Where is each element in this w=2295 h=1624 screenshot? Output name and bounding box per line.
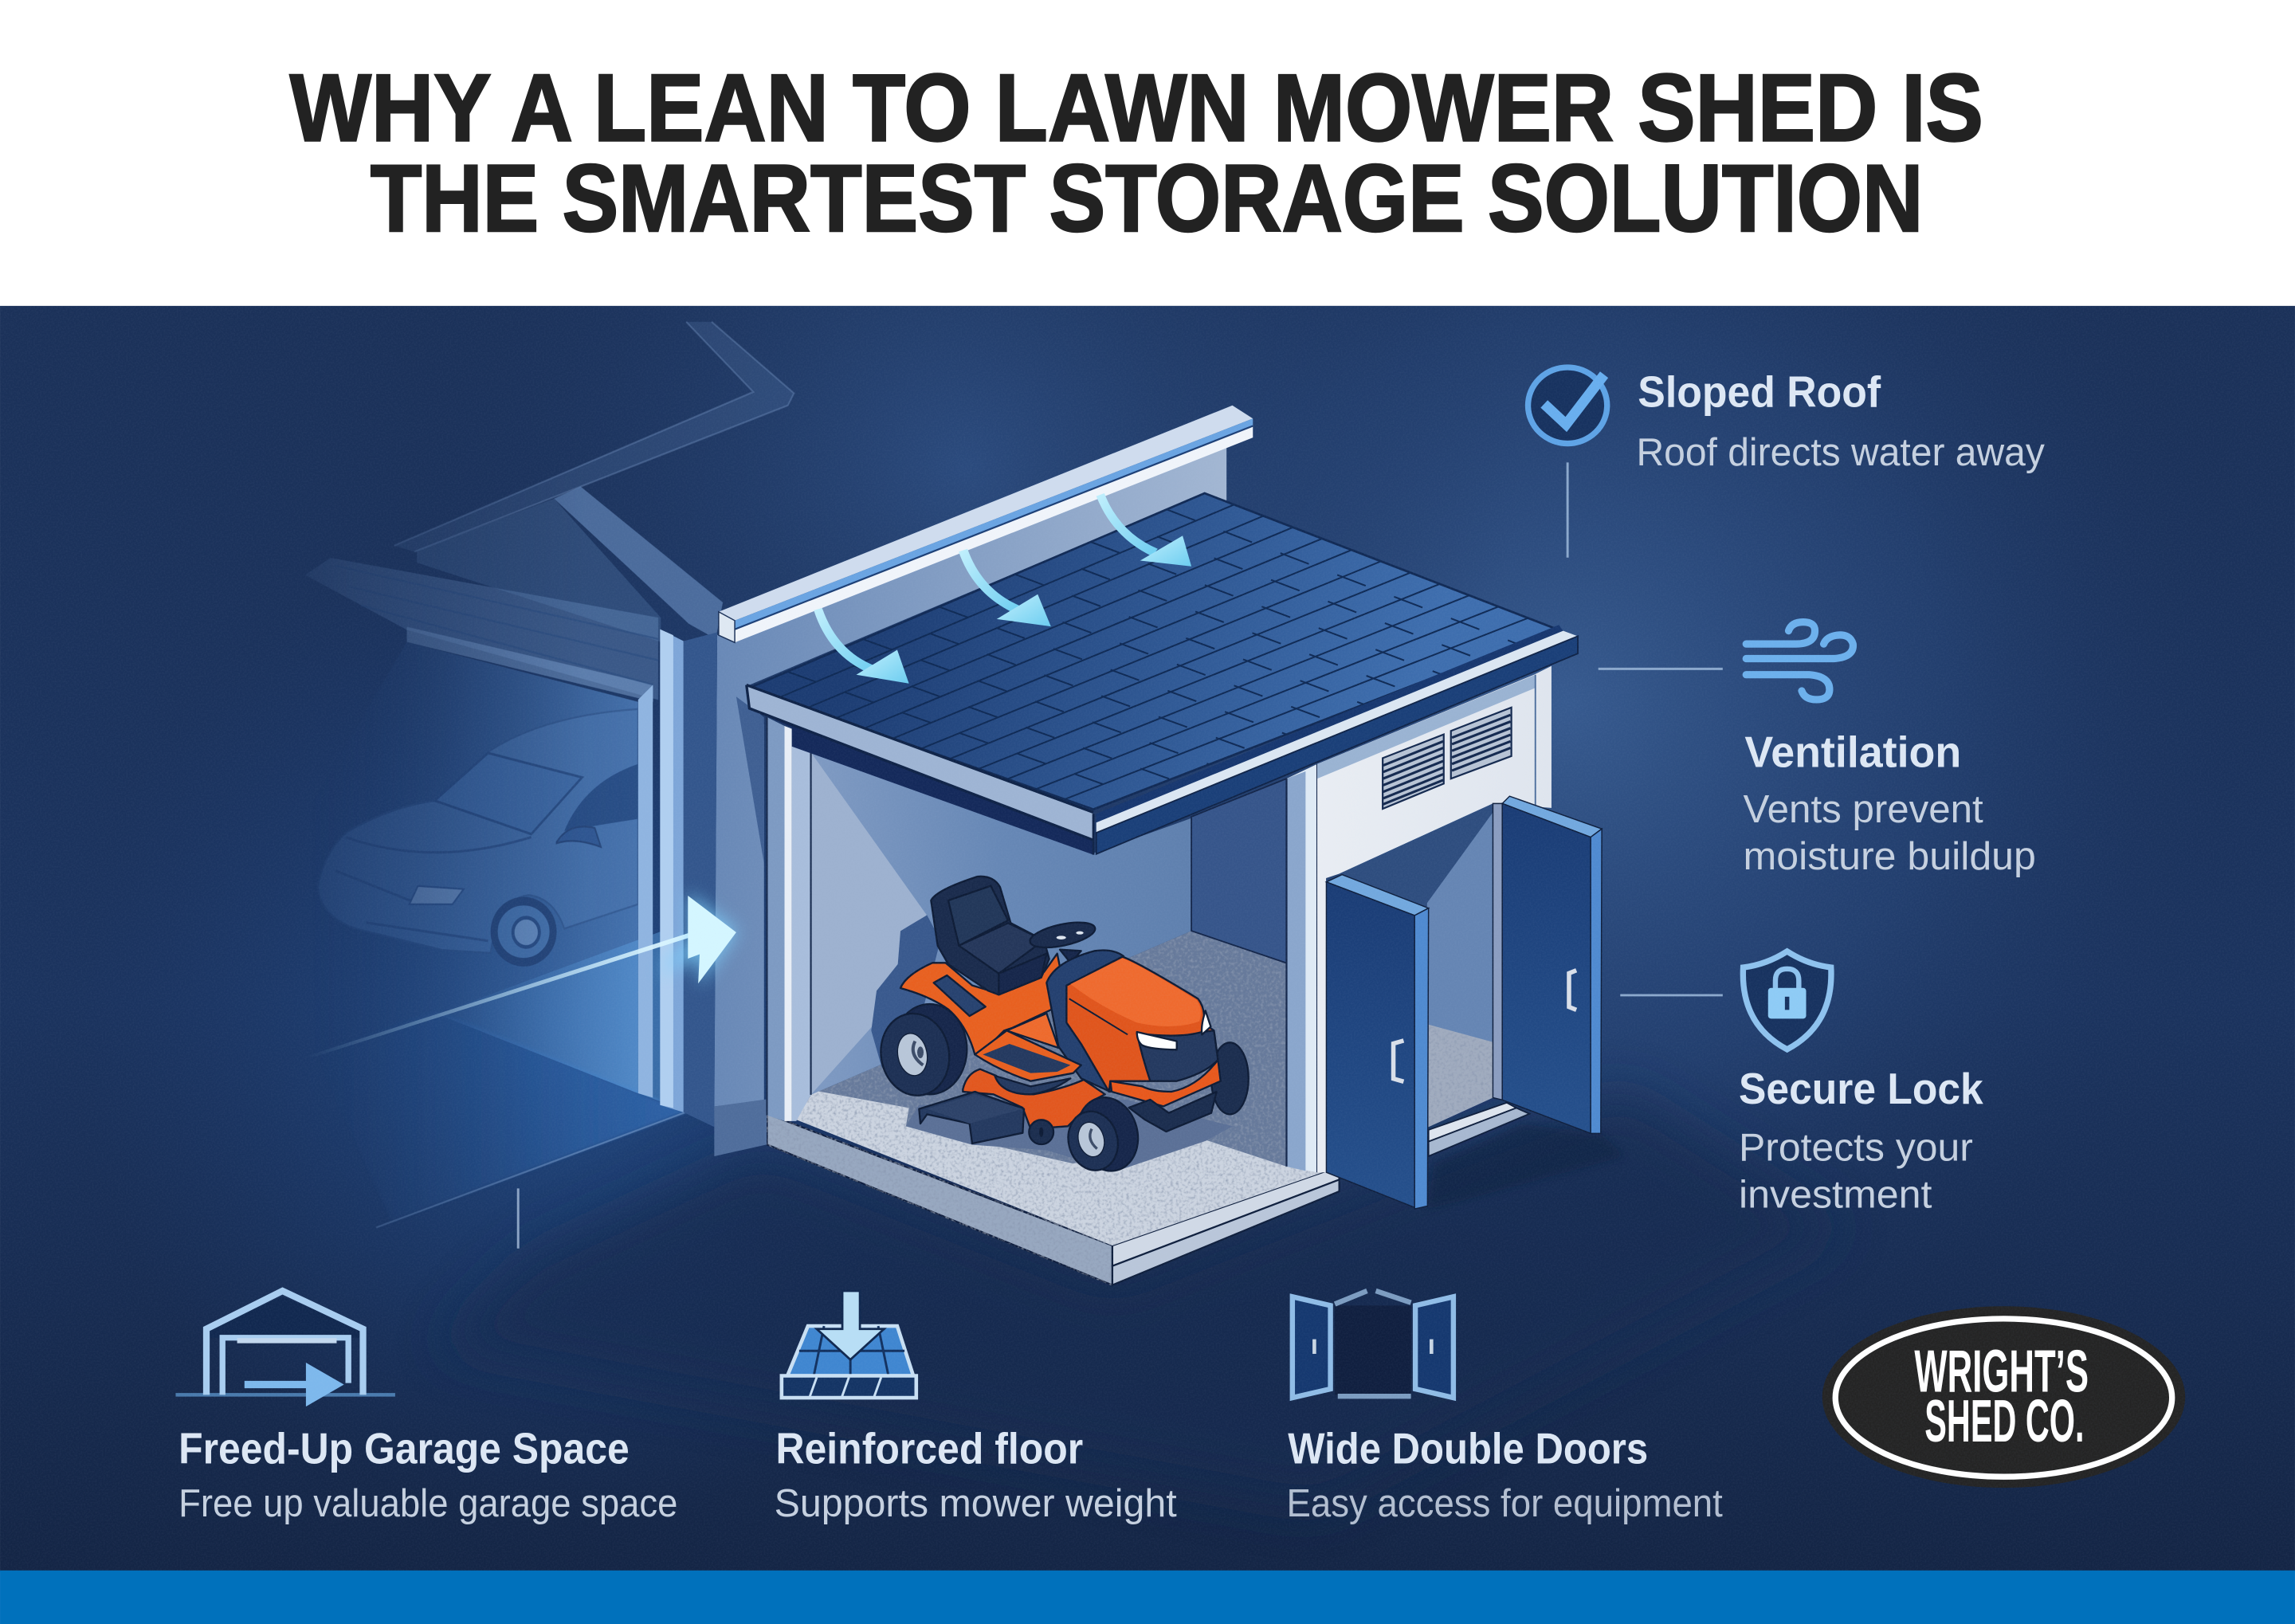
icon: floor with arrow: [782, 1291, 916, 1398]
left pillar: [767, 717, 811, 1121]
grille: [1137, 1030, 1218, 1081]
water flow arrows: [814, 493, 1191, 684]
upper garage roof line: [394, 322, 794, 551]
icon: shield lock: [1743, 951, 1831, 1049]
lower body: [963, 1069, 1105, 1129]
dark blue panel background: [0, 306, 2295, 1572]
slab left side: [767, 1114, 1112, 1285]
arrow 1: [814, 608, 909, 684]
callout: sloped roof: [1528, 367, 2045, 558]
arrow 3: [1096, 493, 1191, 567]
title: THE SMARTEST STORAGE SOLUTION: [371, 146, 1923, 252]
steering wheel: [1028, 918, 1097, 963]
feature: reinforced floor: [775, 1291, 1177, 1525]
car silhouette: [318, 709, 638, 962]
underside panel: [994, 1076, 1070, 1094]
front fascia: [1093, 625, 1578, 855]
shadow under fascia on panel: [1317, 675, 1536, 779]
mower deck: [919, 1092, 1024, 1143]
secure lock description: [1739, 1125, 1973, 1216]
connector line: [1567, 462, 1568, 558]
nose: [1110, 1060, 1221, 1106]
secure lock description: investment: [1739, 1171, 1932, 1216]
garage floor surface: [796, 931, 1340, 1245]
side light: [1202, 1010, 1210, 1034]
panel right stripe: [1535, 675, 1536, 808]
lawn mower: [871, 877, 1249, 1178]
connector line: [1620, 994, 1723, 996]
icon: open double doors: [1293, 1291, 1454, 1398]
description: Easy access for equipment: [1286, 1481, 1723, 1525]
sloped roof heading: Sloped Roof: [1638, 367, 1881, 417]
wall shadow strip: [684, 632, 717, 1127]
rafter: [554, 487, 723, 639]
transfer arrow: [304, 892, 738, 1057]
door jamb: [638, 630, 684, 1112]
rear wheel: [874, 1004, 967, 1101]
house base: [714, 1099, 767, 1156]
feature: wide double doors: [1286, 1291, 1723, 1525]
shed front panel: [1317, 666, 1552, 1172]
connector line: [1599, 668, 1723, 669]
heading: Wide Double Doors: [1288, 1424, 1648, 1473]
footrest: [975, 1030, 1081, 1081]
fender pad: [934, 975, 986, 1016]
icon: garage with arrow: [175, 1291, 395, 1406]
foot pad: [983, 1044, 1070, 1073]
header bands: [305, 558, 658, 702]
right door handle: [1569, 971, 1576, 1010]
description: Free up valuable garage space: [178, 1481, 677, 1525]
secure lock heading: Secure Lock: [1739, 1064, 1983, 1113]
seat: [931, 877, 1049, 994]
arrow 2: [959, 549, 1051, 626]
hood side line: [1069, 998, 1128, 1034]
lit part of wall: [811, 752, 927, 1095]
ventilation description: moisture buildup: [1744, 834, 2036, 878]
ventilation heading: Ventilation: [1744, 727, 1961, 776]
gable interior: [417, 499, 661, 642]
panel grain texture: [0, 306, 2295, 1571]
logo: [1822, 1306, 2185, 1488]
mower shadow on wall: [871, 915, 940, 1068]
heading: Freed-Up Garage Space: [178, 1424, 630, 1473]
secure lock description: Protects your: [1739, 1125, 1973, 1170]
sloped roof description: Roof directs water away: [1636, 430, 2045, 474]
logo: SHED CO.: [1924, 1387, 2084, 1454]
garage interior: [418, 645, 638, 1093]
left fascia: [747, 685, 1093, 855]
icon: wind: [1746, 622, 1853, 700]
left door handle: [1394, 1041, 1403, 1081]
cowl: [1046, 950, 1153, 1092]
feature: freed-up garage space: [175, 1291, 677, 1525]
shed roof back wall: [714, 446, 1226, 1107]
right door: [1493, 796, 1602, 1133]
gutter on roof top: [719, 406, 1253, 642]
blue floor glow: [316, 1011, 687, 1222]
front plate: [1006, 1014, 1058, 1048]
callout: ventilation: [1599, 622, 2036, 878]
icon: check badge: [1528, 367, 1607, 444]
under chassis: [1129, 1092, 1217, 1132]
far wheel: [1211, 1042, 1249, 1114]
doorway interior: [1340, 803, 1493, 1171]
small wheel: [1029, 1120, 1053, 1144]
hood and side: [1066, 957, 1218, 1092]
left door: [1326, 875, 1429, 1209]
description: Supports mower weight: [775, 1481, 1177, 1525]
rear body: [900, 954, 1060, 1054]
garage and car in background: [305, 322, 794, 1227]
mower shadow on floor: [906, 1100, 1233, 1171]
slab front side: [1112, 1167, 1340, 1285]
light beam over garage floor: [437, 922, 686, 1111]
floor edge line: [376, 1112, 687, 1227]
interior right wall: [1191, 779, 1286, 963]
shed front pillar: [1286, 764, 1317, 1172]
headlight: [1137, 1032, 1177, 1049]
shadow under roof on wall: [736, 696, 764, 864]
vents: [1383, 708, 1512, 809]
front wheel: [1061, 1091, 1146, 1178]
blue footer bar: [0, 1571, 2295, 1624]
hood top highlight: [1070, 959, 1201, 1026]
ventilation description: [1744, 787, 2036, 878]
heading: Reinforced floor: [775, 1424, 1083, 1473]
title: WHY A LEAN TO LAWN MOWER SHED IS: [290, 55, 1983, 161]
logo: WRIGHT’S: [1914, 1338, 2089, 1405]
callout: secure lock: [1620, 951, 1983, 1216]
ventilation description: Vents prevent: [1744, 787, 1983, 831]
pointer line under garage: [517, 1188, 519, 1249]
door threshold: [1429, 1103, 1529, 1156]
lit floor area: [796, 1090, 1340, 1245]
sloped shingle roof: [749, 493, 1557, 810]
interior left wall: [811, 747, 1191, 1095]
door floor shadow: [1427, 1124, 1625, 1209]
white title band: [0, 0, 2295, 308]
title: [290, 55, 1983, 252]
